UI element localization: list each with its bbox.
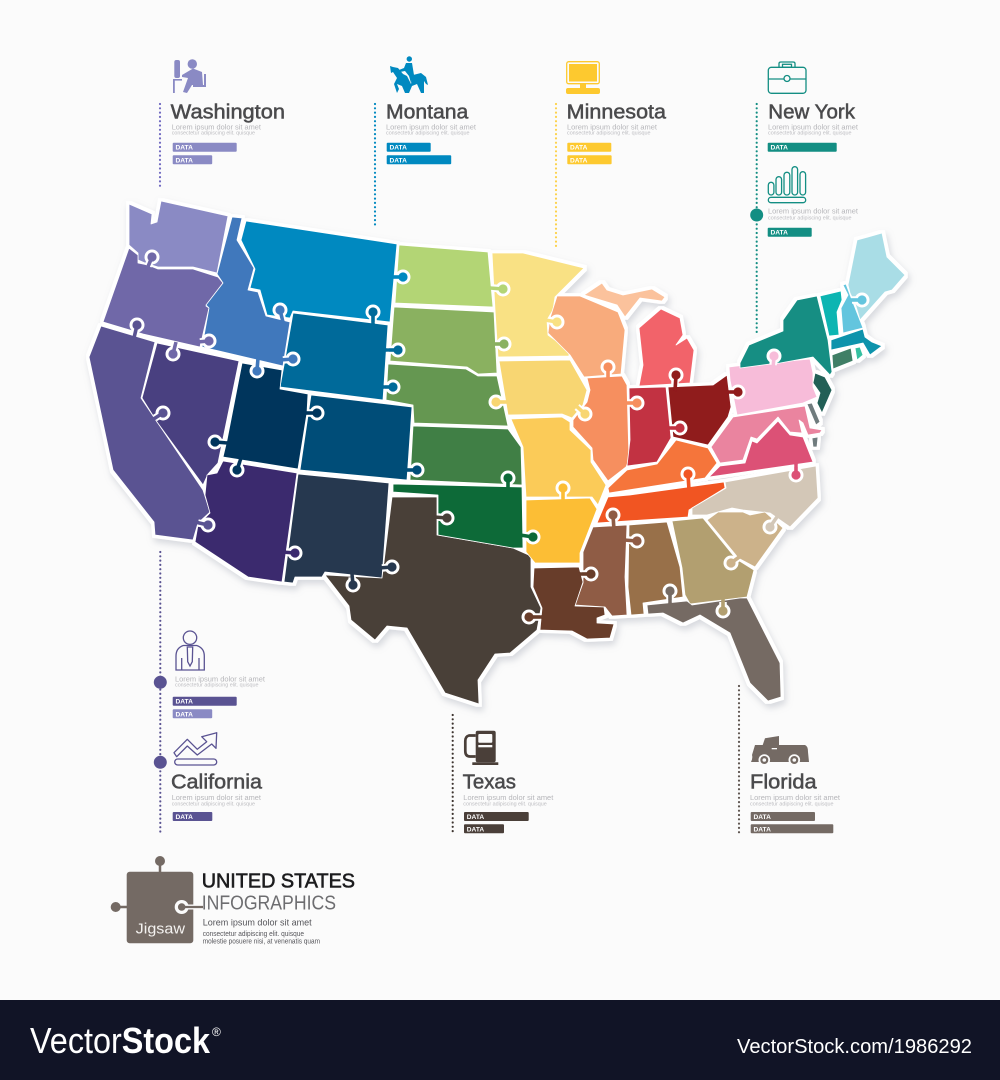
Pennsylvania (729, 359, 817, 415)
description: California lower: Lorem ipsum dolor sit amet (172, 793, 262, 802)
panel: Montana (375, 56, 477, 228)
data bars: Texas (464, 812, 529, 833)
logo description (203, 918, 320, 945)
data bar: New York (768, 143, 837, 152)
Indiana (627, 387, 671, 466)
panel: Washington (160, 59, 285, 190)
Louisiana (533, 567, 614, 639)
heading: California: California (171, 771, 263, 793)
description: New York second: consectetur adipiscing elit. quisque (768, 215, 852, 221)
Arkansas (526, 498, 597, 563)
jigsaw map of the United States (89, 201, 905, 704)
Wyoming (280, 313, 388, 400)
Ohio (668, 375, 731, 445)
icon: rising arrow (174, 733, 217, 765)
Illinois (573, 376, 629, 481)
data bars: California upper: DATA (176, 699, 193, 706)
data bars: Washington: DATA (176, 145, 193, 152)
data bars: Florida (751, 812, 833, 833)
description: Florida (750, 793, 841, 807)
marker dot: New York (750, 208, 763, 222)
description: California upper: consectetur adipiscing elit. quisque (175, 683, 258, 689)
data bar: California lower (173, 812, 212, 821)
Nebraska (386, 364, 508, 426)
description: Texas: consectetur adipiscing elit. quisque (463, 801, 547, 807)
heading: Florida: Florida (750, 771, 818, 793)
description: Minnesota: Lorem ipsum dolor sit amet (567, 122, 658, 131)
Alabama (628, 522, 683, 615)
icon: horse and rider (390, 56, 428, 93)
data bars: Minnesota (567, 143, 612, 164)
panel: Texas (453, 715, 554, 835)
data bar: New York: DATA (770, 145, 788, 152)
heading: New York: New York (768, 101, 856, 123)
Virginia eastern shore (812, 437, 818, 447)
footer logo: VectorStock: VectorStock (30, 1020, 211, 1061)
description: Florida: consectetur adipiscing elit. quisque (750, 801, 834, 807)
leader line: Minnesota (555, 104, 557, 248)
description: Minnesota (567, 122, 658, 137)
description: New York (768, 122, 859, 137)
Georgia (672, 518, 754, 604)
description: Florida: Lorem ipsum dolor sit amet (750, 793, 841, 802)
description: California lower: consectetur adipiscing elit. quisque (172, 801, 255, 807)
Colorado (300, 395, 412, 480)
West Virginia and Maryland (711, 406, 822, 463)
marker dot: California lower (154, 756, 167, 769)
data bars: Montana: DATA (390, 145, 407, 152)
panel: California (154, 552, 266, 835)
description: New York second: Lorem ipsum dolor sit amet (768, 206, 859, 215)
Michigan upper peninsula (584, 283, 665, 317)
description: New York second (768, 206, 859, 221)
Michigan lower peninsula (639, 309, 694, 386)
Tennessee (597, 482, 725, 523)
footer image reference: VectorStock.com/1986292 (737, 1036, 972, 1058)
Wisconsin (548, 296, 625, 377)
Massachusetts (831, 329, 882, 355)
description: Montana: Lorem ipsum dolor sit amet (386, 122, 477, 131)
data bars: Washington: DATA (176, 157, 193, 164)
Maine (848, 233, 905, 320)
data bar: New York second (768, 228, 812, 237)
panel: Minnesota (556, 62, 667, 248)
Washington (129, 201, 228, 273)
California (89, 326, 210, 540)
title: United States: UNITED STATES (202, 870, 355, 892)
data bars: Texas: DATA (467, 826, 484, 833)
icon: jigsaw piece logo: Jigsaw (136, 920, 185, 937)
logo description: molestie posuere nisi, at venenatis quam (203, 938, 320, 945)
footer bar (0, 1000, 1000, 1080)
logo block: United States Infographics (111, 856, 355, 945)
description: California lower (172, 793, 262, 807)
Utah (223, 363, 308, 469)
leader line: California (159, 552, 161, 835)
description: Texas: Lorem ipsum dolor sit amet (463, 793, 554, 802)
Minnesota (492, 253, 584, 357)
data bars: Texas: DATA (467, 814, 484, 821)
Oklahoma (393, 484, 523, 548)
heading: Minnesota: Minnesota (567, 101, 667, 123)
Oregon (103, 248, 223, 347)
data bars: Minnesota: DATA (570, 157, 588, 164)
New Jersey (813, 373, 832, 413)
Missouri (511, 417, 606, 505)
Florida (647, 598, 781, 701)
data bars: Montana (387, 143, 451, 164)
icon: bar chart outline (768, 167, 806, 203)
South Carolina (707, 512, 783, 567)
Virginia (709, 421, 813, 477)
data bar: New York second: DATA (770, 230, 788, 237)
Kentucky (608, 440, 717, 493)
heading: Montana: Montana (386, 101, 469, 123)
subtitle: Infographics: INFOGRAPHICS (202, 892, 336, 914)
icon: car (751, 736, 809, 766)
icon: jigsaw piece logo (111, 856, 203, 943)
description: New York: Lorem ipsum dolor sit amet (768, 122, 859, 131)
description: Montana (386, 122, 477, 137)
Kansas (410, 426, 522, 485)
leader line: Washington (159, 104, 161, 190)
description: Texas (463, 793, 554, 807)
description: Washington (172, 122, 262, 137)
Montana (241, 221, 397, 322)
South Dakota (390, 307, 497, 374)
description: Washington: Lorem ipsum dolor sit amet (172, 122, 262, 131)
data bars: Minnesota: DATA (570, 145, 588, 152)
Rhode Island (855, 347, 863, 360)
Vermont (820, 291, 842, 336)
heading: Texas: Texas (463, 771, 516, 793)
description: California upper (175, 674, 266, 689)
panel: Florida (739, 686, 841, 835)
description: California upper: Lorem ipsum dolor sit amet (175, 674, 266, 683)
description: Washington: consectetur adipiscing elit. quisque (172, 131, 255, 137)
New York (740, 296, 832, 375)
Nevada (142, 343, 239, 485)
data bars: California upper (173, 697, 237, 718)
icon: person at desk (173, 59, 206, 93)
description: Minnesota: consectetur adipiscing elit. quisque (567, 131, 650, 137)
data bars: Florida: DATA (754, 814, 771, 821)
leader line: Florida (738, 686, 740, 835)
icon: fuel pump (465, 731, 498, 765)
New Hampshire (841, 284, 863, 333)
heading: Washington: Washington (171, 101, 285, 123)
data bar: California lower: DATA (176, 814, 193, 821)
marker dot: California upper (154, 676, 167, 689)
state pieces (89, 201, 905, 704)
Idaho (202, 217, 290, 366)
data bars: California upper: DATA (176, 711, 193, 718)
logo description: consectetur adipiscing elit. quisque (203, 931, 304, 938)
leader line: Montana (374, 104, 376, 228)
data bars: Florida: DATA (754, 826, 771, 833)
icon: briefcase (768, 62, 806, 93)
leader line: Texas (452, 715, 454, 835)
icon: computer monitor (566, 62, 600, 94)
logo description: Lorem ipsum dolor sit amet (203, 918, 312, 929)
registered mark: ® (212, 1025, 221, 1039)
Arizona (195, 461, 297, 582)
North Carolina (692, 466, 818, 527)
description: New York: consectetur adipiscing elit. quisque (768, 131, 852, 137)
New Mexico (284, 474, 389, 583)
Mississippi (575, 525, 627, 616)
panel: New York (750, 62, 859, 332)
Delaware (807, 403, 820, 425)
North Dakota (395, 245, 493, 307)
data bars: Washington (173, 143, 237, 164)
jigsaw connector tabs (130, 250, 870, 624)
data bars: Montana: DATA (390, 157, 407, 164)
icon: businessman (176, 631, 204, 670)
Iowa (499, 360, 587, 418)
leader line: New York (756, 104, 758, 332)
Connecticut (832, 348, 853, 369)
description: Montana: consectetur adipiscing elit. quisque (386, 131, 470, 137)
Texas (325, 497, 541, 704)
